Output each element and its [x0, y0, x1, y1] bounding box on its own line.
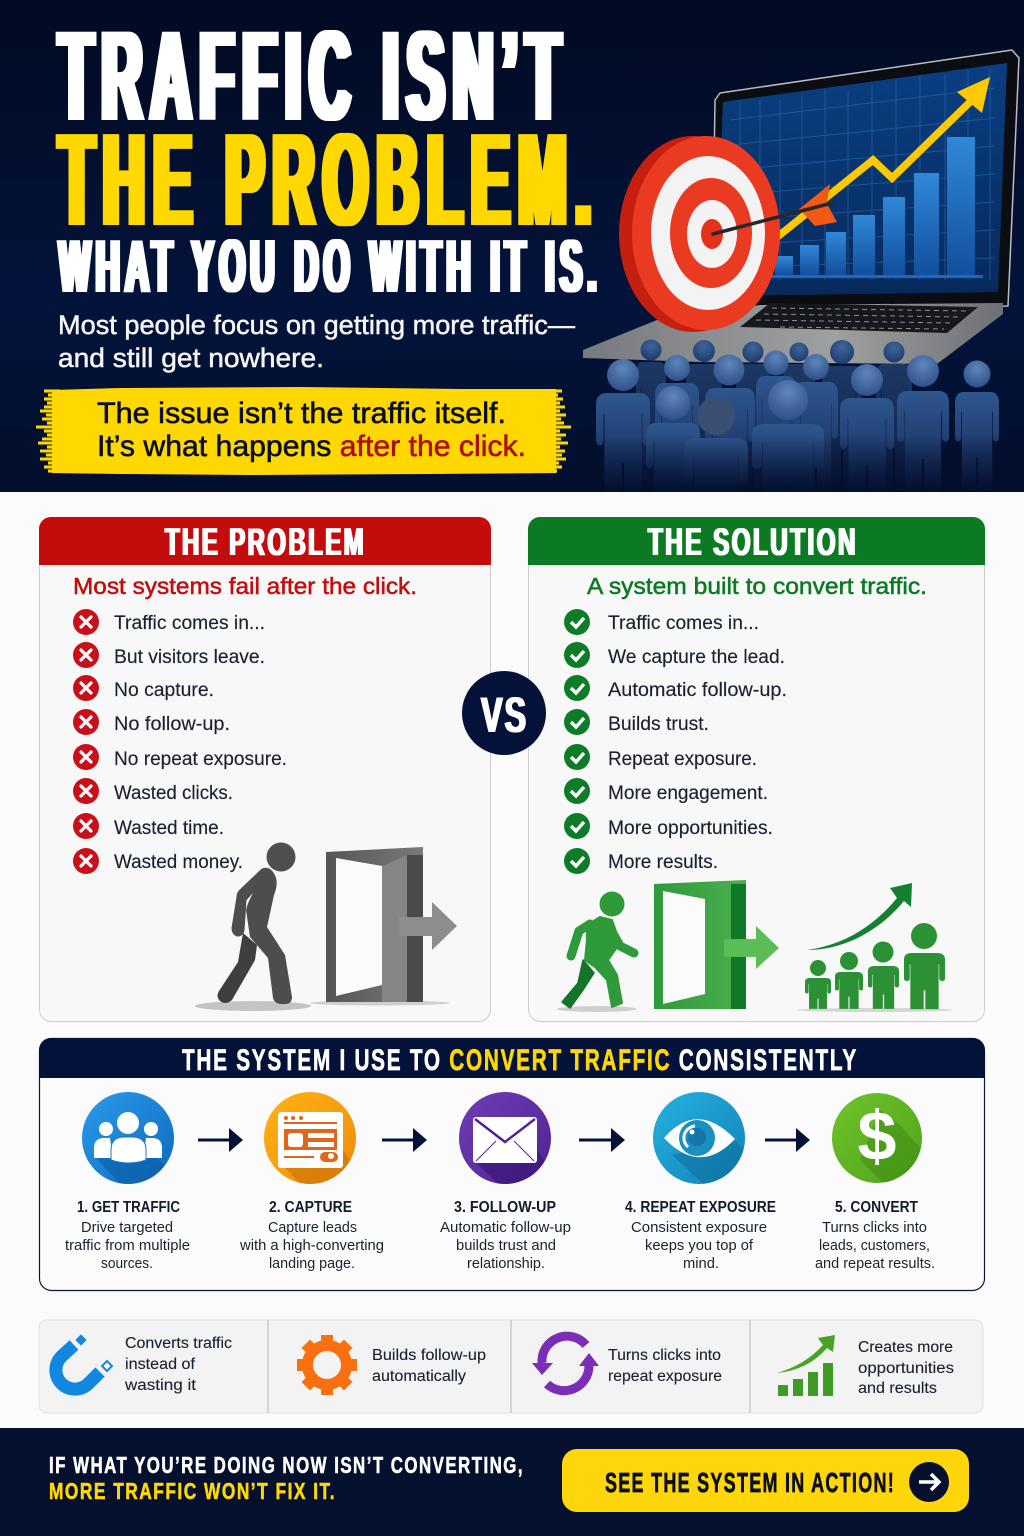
VS badge: VS: [481, 687, 528, 743]
step 5 text: leads, customers,: [819, 1238, 930, 1254]
benefit: turns clicks: [532, 1336, 722, 1391]
icon: arrow circle: [909, 1462, 949, 1502]
benefit: creates more: Creates more: [858, 1339, 953, 1356]
back row: [636, 340, 912, 492]
target side: [619, 136, 767, 332]
laptop screen: [715, 63, 1007, 296]
step 4 text: keeps you top of: [645, 1238, 754, 1254]
callout text: The issue isn’t the traffic itself.: [97, 397, 506, 430]
problem list: Wasted clicks.: [114, 783, 233, 804]
problem list: [73, 609, 287, 874]
step 4 text: mind.: [683, 1256, 719, 1272]
step 3 text: [440, 1199, 571, 1272]
solution list: Repeat exposure.: [608, 749, 757, 770]
benefit: creates more: [777, 1335, 954, 1397]
arrow: [198, 1128, 243, 1152]
benefit: builds follow-up: automatically: [372, 1368, 466, 1385]
solution list: More results.: [608, 852, 718, 873]
problem list: But visitors leave.: [114, 647, 265, 668]
step 2 text: with a high-converting: [239, 1238, 384, 1254]
benefit: converts traffic: wasting it: [124, 1377, 197, 1394]
callout: brush stroke: [36, 387, 571, 475]
illustration: target with arrow: [619, 136, 837, 332]
benefit: turns clicks: repeat exposure: [608, 1368, 722, 1385]
callout text: [97, 397, 526, 463]
problem list: Wasted time.: [114, 818, 224, 839]
icon: dollar: [832, 1093, 922, 1183]
solution header: THE SOLUTION: [648, 521, 858, 564]
problem header: [39, 517, 491, 565]
benefit: turns clicks: Turns clicks into: [608, 1347, 721, 1364]
footer bar: [0, 1428, 1024, 1536]
problem list: No capture.: [114, 680, 214, 701]
problem list: No repeat exposure.: [114, 749, 287, 770]
problem list: Wasted money.: [114, 852, 243, 873]
benefit: builds follow-up: [297, 1335, 486, 1395]
screen grid: [730, 70, 995, 280]
step 1 text: sources.: [101, 1256, 153, 1272]
title: [59, 5, 602, 308]
icon: growth chart: [777, 1335, 835, 1396]
step 5 text: [815, 1199, 935, 1272]
icon: landing page: [264, 1092, 356, 1184]
step 2: capture: [239, 1092, 384, 1272]
VS badge: [462, 671, 546, 755]
laptop base: [583, 303, 1003, 364]
step 2 text: [239, 1199, 384, 1272]
solution header: [528, 517, 985, 565]
keyboard: [740, 303, 978, 333]
front row: [646, 380, 824, 488]
step 5 text: Turns clicks into: [822, 1220, 927, 1236]
solution list: We capture the lead.: [608, 647, 785, 668]
dart: [713, 184, 837, 234]
step 2 text: 2. CAPTURE: [269, 1199, 352, 1216]
icon: sync arrows: [532, 1336, 599, 1391]
step 5 text: and repeat results.: [815, 1256, 935, 1272]
solution list: Traffic comes in...: [608, 613, 759, 634]
benefit: creates more: and results: [858, 1380, 937, 1397]
problem subheading: Most systems fail after the click.: [73, 573, 417, 599]
step 1 text: [65, 1199, 190, 1272]
icon: person walking through: [557, 892, 637, 1012]
callout text: It’s what happens after the click.: [97, 430, 526, 463]
step 4: repeat exposure: [625, 1092, 776, 1272]
solution list: Builds trust.: [608, 714, 709, 735]
hero banner: [0, 0, 1024, 528]
benefit: creates more: opportunities: [858, 1360, 954, 1377]
illustration: crowd: [596, 340, 999, 487]
step 3 text: 3. FOLLOW-UP: [454, 1199, 556, 1216]
benefit: builds follow-up: Builds follow-up: [372, 1347, 486, 1364]
icon: grey exit door: [310, 847, 457, 1006]
system header: [39, 1038, 985, 1078]
illustration: laptop with chart: [583, 50, 1019, 364]
icon: green open door: [654, 880, 779, 1009]
step 3 text: Automatic follow-up: [440, 1220, 571, 1236]
solution list: Automatic follow-up.: [608, 680, 787, 701]
problem list: Traffic comes in...: [114, 613, 265, 634]
icon: eye: [653, 1092, 745, 1184]
arrow: [382, 1128, 427, 1152]
panel: the solution: [528, 517, 985, 1022]
solution subheading: A system built to convert traffic.: [587, 573, 927, 599]
subtitle: and still get nowhere.: [58, 343, 324, 373]
crowd fade: [596, 440, 992, 492]
step 1 text: traffic from multiple: [65, 1238, 190, 1254]
problem header: THE PROBLEM: [165, 521, 366, 564]
step 1 text: Drive targeted: [81, 1220, 173, 1236]
benefits strip: [39, 1320, 983, 1413]
step 2 text: landing page.: [269, 1256, 355, 1272]
footer text: IF WHAT YOU’RE DOING NOW ISN’T CONVERTING,: [49, 1452, 524, 1478]
icon: audience: [82, 1092, 174, 1184]
benefit: converts traffic: Converts traffic: [125, 1335, 232, 1352]
benefit: converts traffic: instead of: [125, 1356, 196, 1373]
step 1 text: 1. GET TRAFFIC: [77, 1199, 180, 1216]
step 5: convert: [815, 1093, 935, 1272]
panel: the system: [39, 1038, 985, 1290]
icon: magnet: [56, 1334, 112, 1389]
footer text: [49, 1452, 524, 1504]
solution list: More engagement.: [608, 783, 768, 804]
footer text: MORE TRAFFIC WON’T FIX IT.: [49, 1478, 336, 1504]
solution list: More opportunities.: [608, 818, 773, 839]
growth arrow: [776, 77, 990, 238]
system header: THE SYSTEM I USE TO CONVERT TRAFFIC CONSISTENTLY: [182, 1044, 858, 1077]
icon: gear: [297, 1335, 357, 1395]
solution list: [564, 609, 787, 874]
middle row: [596, 350, 999, 500]
icon: growing people with arrow: [797, 883, 953, 1012]
subtitle: [58, 310, 575, 373]
bar chart: [770, 137, 983, 278]
step 4 text: [625, 1199, 776, 1272]
icon: dollar: $: [858, 1097, 896, 1175]
step 5 text: 5. CONVERT: [835, 1199, 918, 1216]
step 4 text: 4. REPEAT EXPOSURE: [625, 1199, 776, 1216]
icon: person walking away: [195, 842, 311, 1011]
benefit: converts traffic: [56, 1334, 232, 1394]
step 3 text: builds trust and: [456, 1238, 556, 1254]
step 2 text: Capture leads: [268, 1220, 357, 1236]
arrow: [765, 1128, 810, 1152]
problem list: No follow-up.: [114, 714, 230, 735]
step 1: get traffic: [65, 1092, 190, 1272]
laptop lid: [712, 50, 1019, 312]
subtitle: Most people focus on getting more traffic—: [58, 310, 575, 340]
step 4 text: Consistent exposure: [631, 1220, 767, 1236]
step 3: follow-up: [440, 1092, 571, 1272]
step 3 text: relationship.: [467, 1256, 545, 1272]
arrow: [579, 1128, 625, 1152]
target rings: [632, 136, 780, 330]
panel: the problem: [39, 517, 491, 1022]
CTA button: [562, 1449, 969, 1512]
icon: envelope: [459, 1092, 551, 1184]
